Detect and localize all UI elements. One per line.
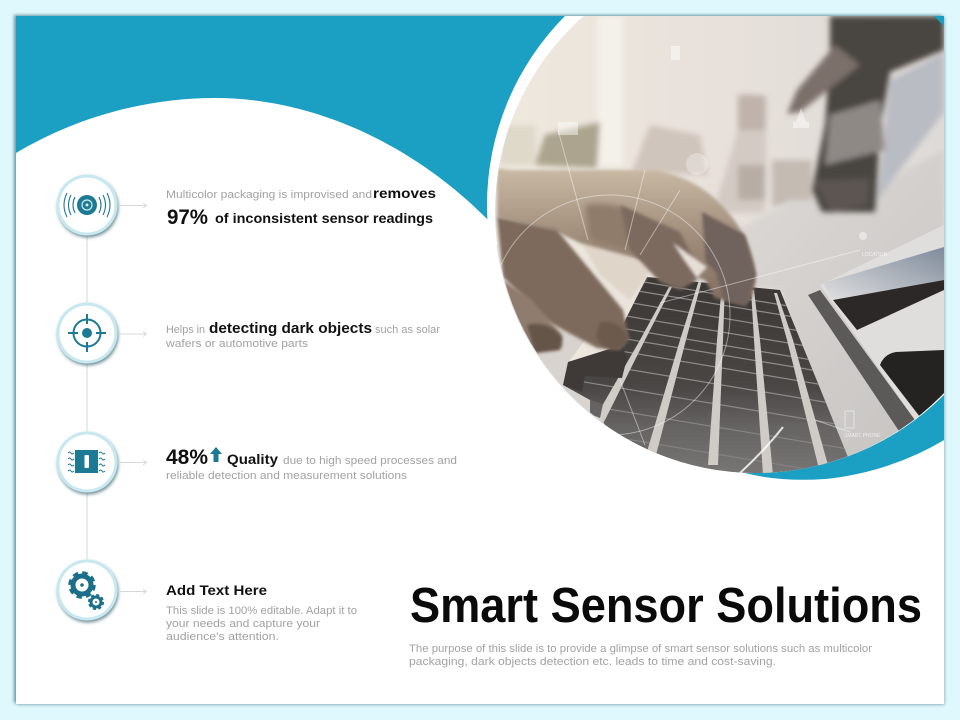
step 3 text: Quality: [227, 451, 278, 467]
step 1 text: of inconsistent sensor readings: [215, 210, 433, 226]
photo: hands typing on a laptop: [495, 16, 944, 473]
left keys: [563, 345, 627, 392]
digital overlay lines: [490, 130, 860, 473]
photo edge line: [497, 245, 600, 421]
step 2 text: such as solar: [375, 324, 440, 336]
step 2 text: wafers or automotive parts: [165, 338, 309, 350]
thumb tip: [527, 324, 562, 353]
step 1 text: [166, 185, 436, 229]
laptop body: [696, 154, 943, 460]
laptop screen: [808, 225, 944, 437]
tablet light panel: [877, 53, 944, 200]
step 3 arrow: [120, 460, 146, 465]
step 4 text: audience's attention.: [166, 631, 279, 643]
step 1 text: Multicolor packaging is improvised and: [166, 189, 372, 201]
overlay icons: [558, 46, 867, 428]
white ring around photo: [487, 0, 960, 473]
key row gaps: [584, 282, 845, 469]
light palm rest: [537, 326, 605, 424]
step 2 icon: target: [56, 302, 118, 364]
middle finger: [620, 205, 697, 290]
step 4 icon: gears: [56, 560, 118, 620]
step 4 text: [166, 582, 357, 643]
small light gap: [673, 243, 707, 278]
step 2 text: detecting dark objects: [209, 321, 372, 337]
step 3 icon: chip: [56, 432, 118, 492]
step 3 text: [166, 446, 457, 482]
step 4 text: Add Text Here: [166, 582, 267, 598]
index fingertip: [596, 322, 628, 349]
description: [409, 643, 872, 668]
laptop frame: [808, 290, 920, 437]
step 1 icon: sensor waves: [56, 174, 118, 236]
teal corner: [934, 16, 944, 26]
screen dark object: [880, 350, 944, 417]
description: packaging, dark objects detection etc. leads to time and cost-saving.: [409, 656, 776, 668]
step 3 text: reliable detection and measurement solutions: [166, 470, 408, 482]
pointing hand: [787, 16, 944, 213]
screen dark stripe: [833, 280, 944, 330]
step 2 text: [165, 321, 440, 350]
step 1 arrow: [120, 203, 146, 208]
step 2 text: Helps in: [166, 324, 205, 336]
step 4 arrow: [120, 589, 146, 594]
up arrow: [210, 447, 222, 462]
photo background: [495, 16, 944, 473]
blurred office background: [500, 16, 812, 213]
title: Smart Sensor Solutions: [410, 579, 922, 633]
thumb: [503, 280, 562, 352]
step 4 text: This slide is 100% editable. Adapt it to: [166, 605, 357, 617]
ring finger: [702, 212, 756, 306]
teal header band: [16, 16, 565, 220]
step 3 text: 48%: [166, 446, 208, 469]
step 1 text: 97%: [167, 206, 208, 229]
step 2 arrow: [120, 332, 146, 336]
overlay label: location: LOCATION: [862, 252, 888, 258]
step 1 text: removes: [373, 185, 436, 201]
description: The purpose of this slide is to provide a glimpse of smart sensor solutions such as multicolor: [409, 643, 872, 655]
keyboard: [563, 277, 848, 473]
shaded knuckle: [584, 202, 628, 248]
teal crescent under photo: [745, 395, 944, 480]
step 3 text: due to high speed processes and: [283, 455, 457, 467]
timeline connector: [86, 236, 88, 559]
hand back: [497, 168, 755, 305]
light gap between fingers: [583, 244, 650, 299]
index finger: [497, 217, 629, 350]
teal crescent upper edge: [825, 395, 944, 479]
step 4 text: your needs and capture your: [166, 618, 320, 630]
screen reflection: [823, 247, 944, 300]
overlay label: smart phone: SMART PHONE: [844, 433, 881, 439]
typing hand: [497, 168, 756, 353]
key column gaps: [594, 280, 828, 475]
